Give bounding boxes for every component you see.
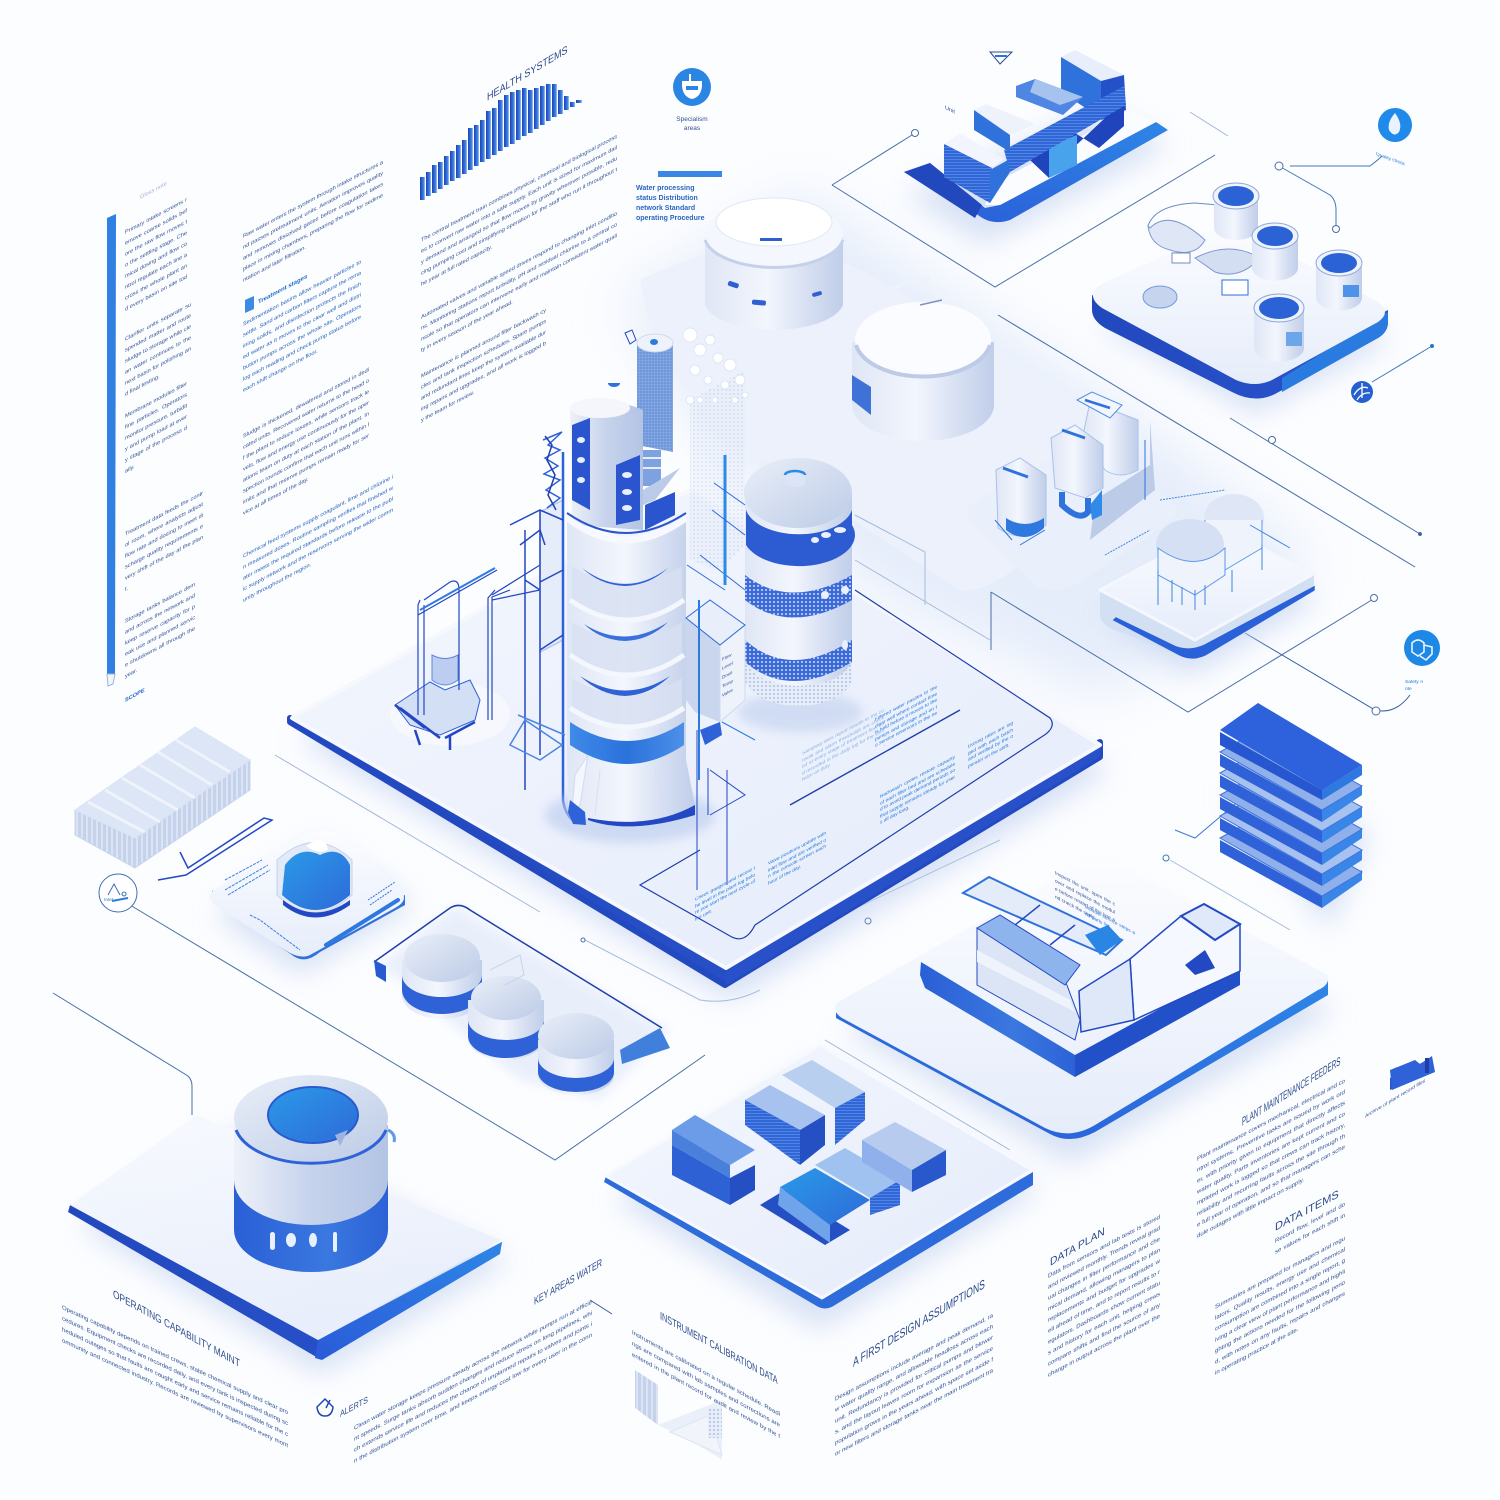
small paper bottom center <box>635 1370 722 1460</box>
icon group: pipe rack <box>510 432 575 822</box>
block <box>782 1060 865 1145</box>
icon: ringed small badge <box>99 874 137 912</box>
mid block <box>974 104 1035 135</box>
text block: column two subheading: Treatment stages <box>258 274 307 306</box>
panel: bottom center blocks platform <box>604 1045 1040 1330</box>
panel: main platform <box>290 490 1110 1000</box>
text block: column one paragraph 3: Membrane modules filter fine particles. Operators monitor pressure, turbidity and pump load at every stage of the process daily. <box>125 381 187 475</box>
tank: second white tank <box>852 278 994 441</box>
lower dark piece <box>1030 100 1124 178</box>
text block: bottom left paragraph: Operating capability depends on trained crews, stable chemical supply and clear procedures. Equipment checks are recorded daily, and every tank is inspected during scheduled outages so that faults are caught early and service remains reliable for the community and connected industry. Records are reviewed by supervisors every month, and training refreshers are arranged as the equipment and standards change. <box>62 1305 288 1452</box>
control cabinet between tanks <box>686 455 755 890</box>
connector lines <box>53 112 1434 1314</box>
block <box>862 1122 946 1192</box>
text block: folder caption: Archive of plant record files <box>1365 1078 1425 1120</box>
left vertical accent bar <box>107 214 116 686</box>
icon: blue square bullet <box>245 296 254 313</box>
text block: top note: Water processing status Distribution network Standard operating Procedure <box>636 185 704 222</box>
soft ground behind upper tanks <box>620 190 1320 700</box>
shell <box>567 515 695 826</box>
panel: bottom left cylinder platform <box>68 1075 510 1375</box>
icon: top triangle badge <box>990 52 1012 64</box>
left block <box>944 133 1004 168</box>
can <box>538 1013 614 1095</box>
text block: column two paragraph 1: Raw water enters the system through intake structures and passes pretreatment units. Aeration improves quality and removes dissolved gases before coagulation takes place in mixing chambers, preparing the flow for sedimentation and later filtration. <box>243 160 383 284</box>
icon: bottom left small badge <box>317 1399 333 1416</box>
heading: chart title: HEALTH SYSTEMS <box>487 44 568 104</box>
heading: bottom center left: KEY AREAS WATER <box>534 1257 602 1308</box>
text block: column one paragraph 2: Clarifier units separate suspended matter and route sludge to storage while clean water continues to the next basin for polishing and final testing. <box>125 302 191 398</box>
text block: instrument paragraph: Instruments are calibrated on a regular schedule. Readings are compared with lab samples and corrections are entered in the plant record for audit and review by the team. Faulty sensors are replaced from stock. <box>632 1330 780 1440</box>
cup <box>1252 223 1298 281</box>
text block: column one paragraph 5: Storage tanks balance demand across the network and keep reserve capacity for peak use and planned service shutdowns all through the year. <box>125 582 195 680</box>
text block: column one paragraph 4: Treatment data feeds the control room, where analysts adjust flow rate and dosing to meet discharge quality requirements every shift of the day at the plant. <box>125 491 203 593</box>
text block: column two paragraph 2: Sedimentation basins allow heavier particles to settle. Sand and carbon filters capture the remaining solids, and disinfection protects the finished water as it moves to the clear well and distribution pumps across the whole site. Operators log each reading and check pump status before each shift change on the floor. <box>243 259 361 394</box>
icon group: mid right equipment cluster <box>967 392 1176 590</box>
icon: top circle <box>673 68 711 106</box>
text block: column three paragraph 1: The central treatment train combines physical, chemical and biological processes to convert raw water into a safe supply. Each unit is sized for maximum daily demand and arranged so that flow moves by gravity wherever possible, reducing pumping cost and simplifying operation for the staff who run it throughout the year at full rated capacity. <box>421 134 617 288</box>
text block: platform notes 4: Dosing rates are logged with each batch and verified by the operator on the shift. <box>968 721 1013 770</box>
block <box>760 1168 870 1245</box>
sub-panel outline on platform <box>640 590 1052 939</box>
panel: cups platform <box>1092 183 1392 415</box>
text block: badge caption: Inlet <box>104 898 113 903</box>
tank: upper white tank <box>705 198 843 330</box>
accent bar top <box>658 171 722 177</box>
text block: column two paragraph 4: Chemical feed systems supply coagulant, lime and chlorine in measured doses. Routine sampling verifies that finished water meets the required standards before release to the public supply network and the reservoirs serving the wider community throughout the region. <box>243 474 393 604</box>
text block: platform notes 2: Sampling lines report results to the console and alarm thresholds are checked at every stage of treatment flow and recorded in the daily log for the shift team on duty. <box>802 708 884 783</box>
heading: data plan: DATA PLAN <box>1050 1225 1105 1269</box>
text block: shield caption: Safety note <box>1405 680 1423 692</box>
striped long slab <box>1004 86 1126 172</box>
bar chart <box>420 84 582 200</box>
block <box>745 1085 825 1165</box>
cup <box>1213 183 1259 240</box>
recessed rings <box>572 566 682 725</box>
text block: icon caption: Specialism <box>676 116 708 123</box>
text block: column one header: Gloss note <box>140 181 167 201</box>
heading: small tag top: Unit <box>945 105 955 116</box>
panel: three cans platform <box>374 905 670 1100</box>
text block: icon caption: areas <box>684 125 700 132</box>
can <box>468 955 544 1060</box>
heading: small note: ALERTS <box>340 1394 368 1419</box>
icon group: left process equipment on platform <box>390 565 540 750</box>
tank <box>234 1075 394 1272</box>
text block: platform notes 5: Valve positions update with inlet flow and are verified on the console screen each hour of the day. <box>768 831 826 886</box>
text block: column one footer: SCOPE <box>125 688 145 704</box>
block <box>815 1148 900 1215</box>
icon: pleated filter block <box>75 727 272 880</box>
heading: plant maintenance: PLANT MAINTENANCE FEEDERS <box>1242 1054 1340 1129</box>
cup <box>1254 294 1304 362</box>
rear block <box>1061 50 1124 81</box>
unit 3 <box>1082 402 1138 475</box>
text block: column three paragraph 2: Automated valves and variable speed drives respond to changing inlet conditions. Monitoring stations report turbidity, pH and residual chlorine to a central console so that operators can intervene early and maintain consistent water quality in every season of the year ahead. <box>421 211 617 354</box>
text block: platform notes 6: Check gauges and record the level in the plant log before you start the next cycle of the unit. <box>695 866 755 922</box>
text block: data items lower: Summaries are prepared for managers and regulators. Quality results, energy use and chemical consumption are combined into a single report, giving a clear view of plant performance and highlighting the actions needed for the following period, with notes on any faults, repairs and changes in operating practice at the site. <box>1215 1236 1345 1377</box>
steam plume <box>683 328 748 570</box>
panel: bottom right machine platform <box>835 858 1335 1165</box>
text block: top right caption: Quality check <box>1376 152 1405 167</box>
panel: small dome platform <box>210 831 415 975</box>
heading: instrument section: INSTRUMENT CALIBRATION DATA <box>660 1310 778 1387</box>
icon: shield circle <box>1404 630 1440 666</box>
text block: machine note: Inspect the unit, open the cover and replace the module before restart of the line and check the seals. <box>1055 871 1115 924</box>
panel: top right blocks platform <box>904 50 1170 245</box>
block <box>672 1115 755 1205</box>
heading: operating capability: OPERATING CAPABILITY MAINT <box>113 1288 240 1370</box>
text block: platform notes 3: Backwash cycles restore capacity of each filter bed and are scheduled to avoid peak demand periods so that supply remains steady for users all day long. <box>880 755 955 826</box>
cup <box>1316 250 1362 311</box>
icon: top right droplet circle <box>1378 108 1412 142</box>
text block: icon caption <box>676 116 708 132</box>
icon: folder bottom right <box>1390 1056 1435 1090</box>
panel: filter shelter platform <box>1100 490 1318 675</box>
text block: column three paragraph 3: Maintenance is planned around filter backwash cycles and tank inspection schedules. Spare pumps and redundant lines keep the system available during repairs and upgrades, and all work is logged by the team for review. <box>421 308 546 424</box>
icon: hand badge <box>1351 381 1373 403</box>
text block: column two paragraph 3: Sludge is thickened, dewatered and stored in dedicated units. Recovered water returns to the head of the plant to reduce losses, while sensors track levels, flow and energy use continuously for the operations team on duty at each station of the plant. Inspection rounds confirm that each unit runs within limits and that reserve pumps remain ready for service at all times of the day. <box>243 367 369 517</box>
text block: maintenance paragraph: Plant maintenance covers mechanical, electrical and control systems. Preventive tasks are issued by work order, with priority given to equipment that directly affects water quality. Parts inventories are kept current and completed work is logged so that crews can track history, reliability and recurring faults across the site through the full year of operation, and so that managers can schedule outages with little impact on supply. <box>1197 1078 1345 1240</box>
panel: server stack <box>1220 703 1370 930</box>
unit 1 <box>996 458 1046 536</box>
unit 2 <box>1051 425 1103 498</box>
text block: machine note blue: Module service steps and parts list <box>1085 905 1135 937</box>
inner column <box>570 402 643 530</box>
heading: design assumptions: A FIRST DESIGN ASSUMPTIONS <box>853 1276 985 1370</box>
heading: data items: DATA ITEMS <box>1275 1188 1339 1234</box>
can <box>402 934 482 1019</box>
middle mound <box>1016 79 1083 115</box>
tank: central column <box>545 398 715 843</box>
chart: chimney stack <box>608 330 673 486</box>
text block: cabinet label: Flow Level Dose Temp Valve <box>722 652 733 698</box>
tank: right banded cylinder <box>738 458 862 732</box>
